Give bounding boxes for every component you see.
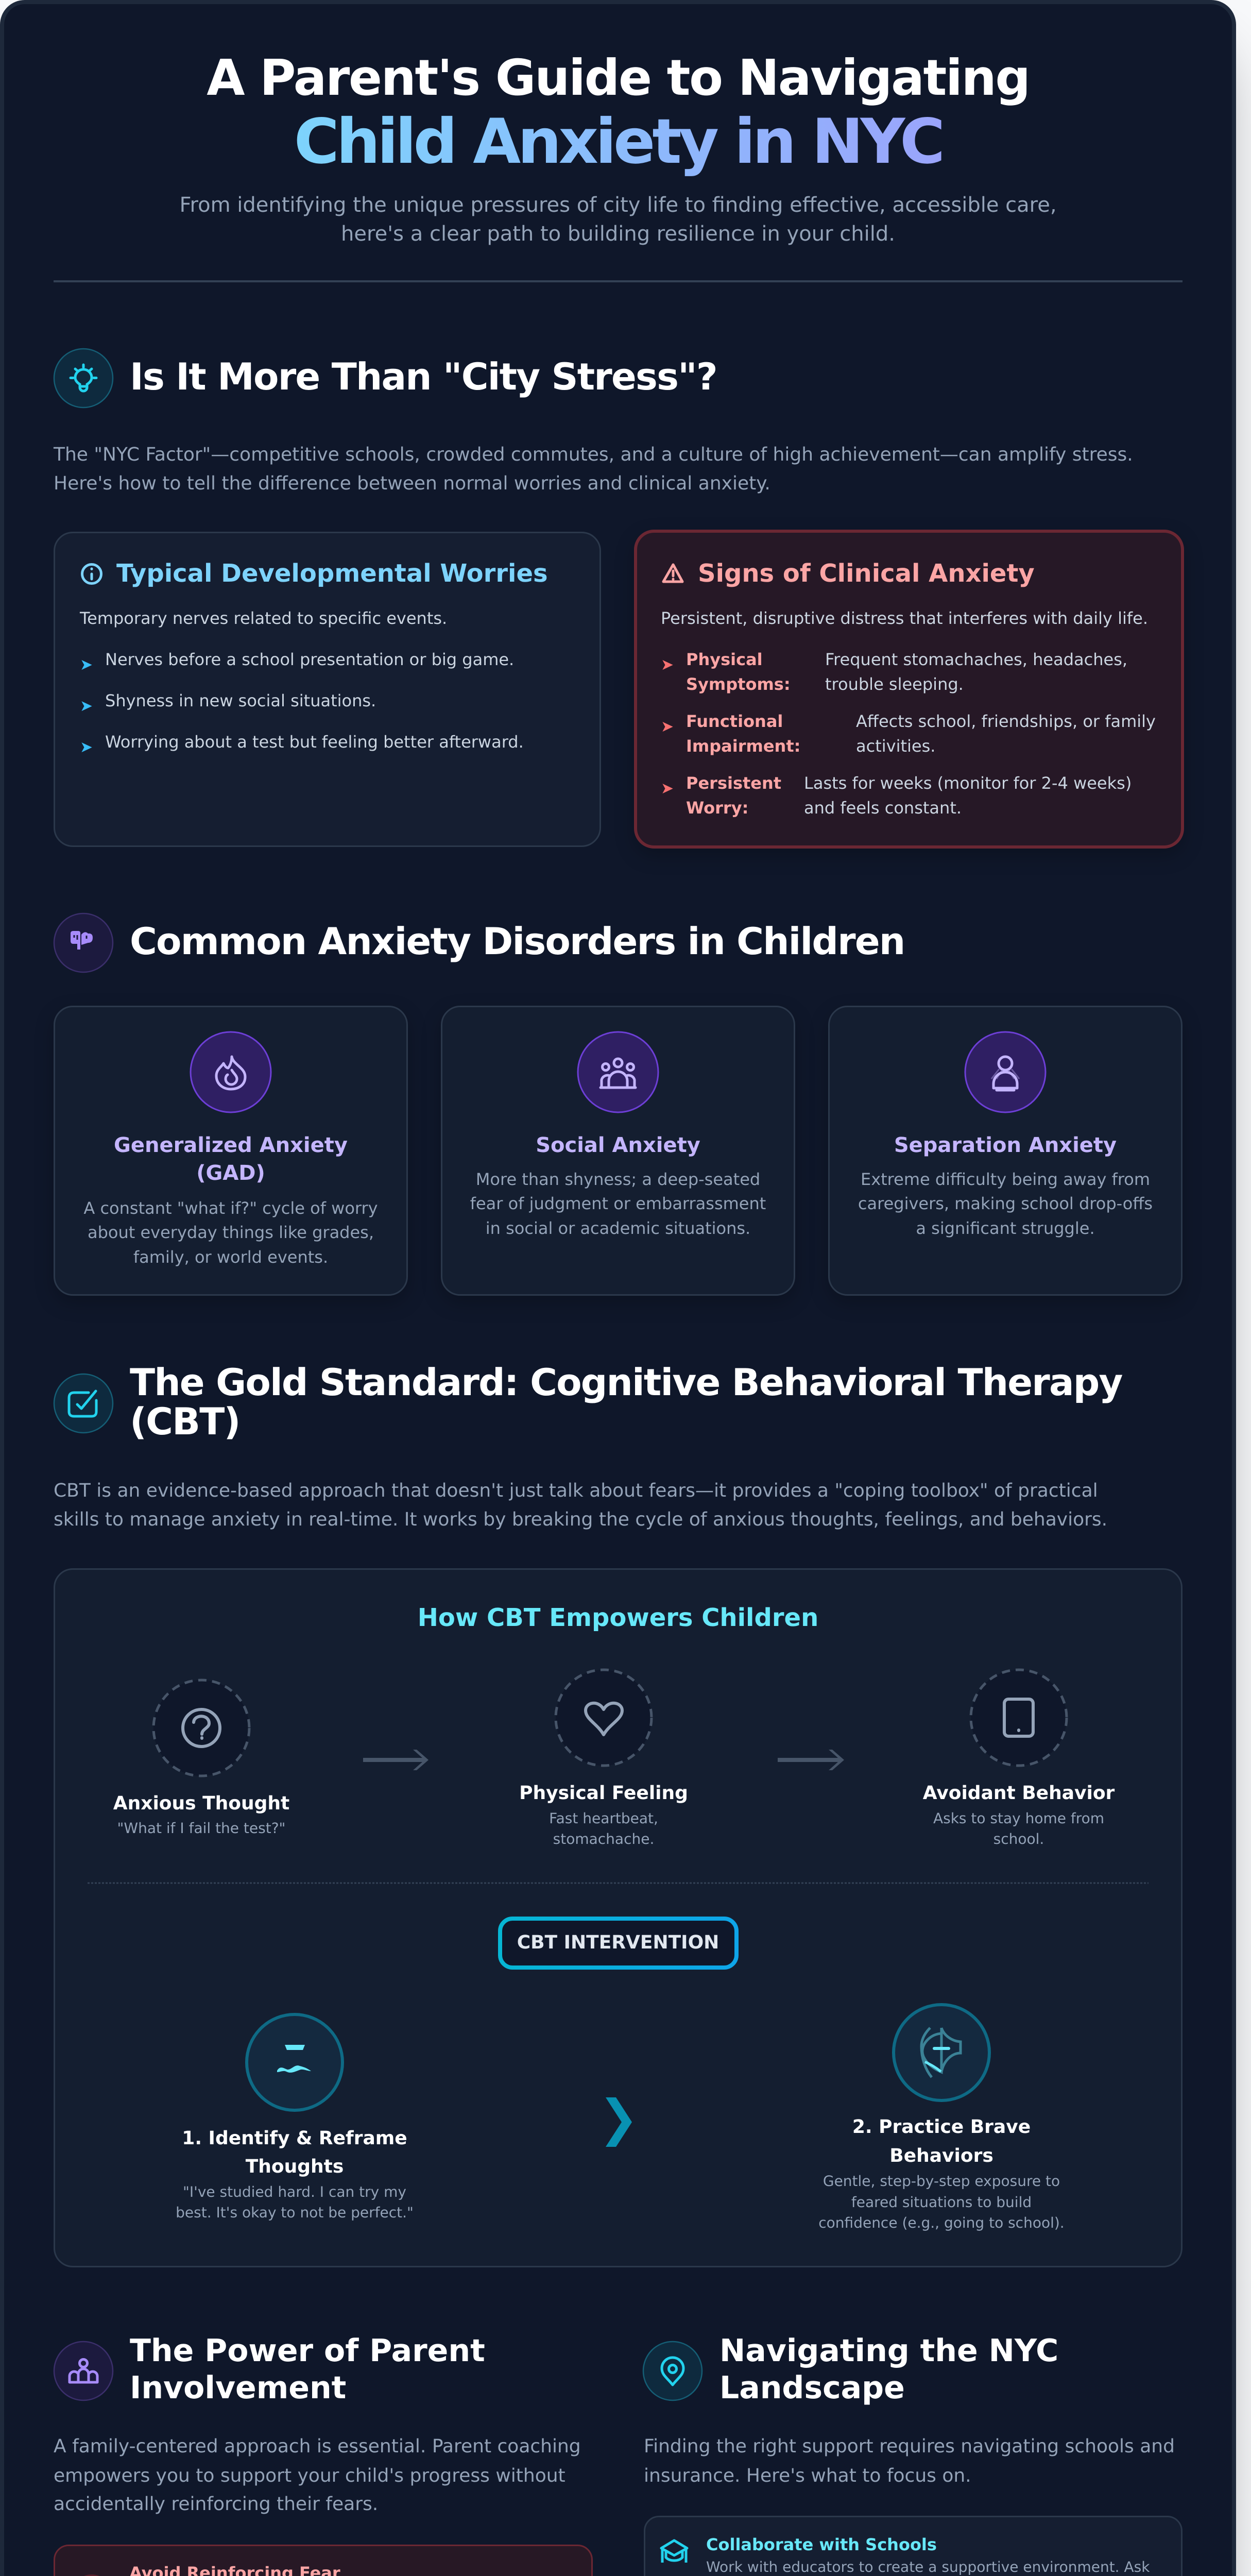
list: typical worries: Shyness in new social situations. (105, 691, 376, 710)
list item: persistent worry: ➤ (661, 779, 674, 798)
card text: GAD: A constant "what if?" cycle of worry (83, 1198, 378, 1218)
list item: physical symptoms: Symptoms: (686, 674, 791, 694)
text: parent involvement: empowers you to support your child's progress without (54, 2465, 565, 2486)
section heading: CBT (54, 1361, 1122, 1443)
icon: lightbulb (54, 349, 113, 408)
card title: GAD: Generalized Anxiety (114, 1133, 348, 1157)
badge: CBT intervention (500, 1919, 736, 1968)
list item: physical symptoms: trouble sleeping. (825, 674, 964, 694)
list: typical worries (80, 650, 524, 756)
title: Child Anxiety in NYC (294, 106, 942, 178)
panel: typical worries: Temporary nerves related to specific events. (79, 608, 447, 628)
card: collaborate with schools: Collaborate with Schools (706, 2535, 937, 2554)
section heading: parent involvement (54, 2333, 485, 2406)
node: brave behaviors (818, 2005, 1065, 2231)
list: typical worries: Nerves before a school presentation or big game. (105, 650, 514, 669)
title (207, 49, 1030, 178)
icon: people group (578, 1032, 658, 1112)
heading: CBT: The Gold Standard: Cognitive Behavioral Therapy (130, 1361, 1122, 1404)
heading: parent involvement: The Power of Parent (130, 2333, 485, 2369)
card text: separation: Extreme difficulty being away from (861, 1170, 1150, 1189)
arrow: chevron (606, 2097, 632, 2147)
node: avoidant behavior: school. (993, 1831, 1044, 1848)
intro text: CBT: CBT is an evidence-based approach that doesn't just talk about fears—it provides a "coping toolbox" of practical (54, 1480, 1098, 1501)
icon: heart (586, 1703, 622, 1735)
section heading: NYC landscape (643, 2333, 1058, 2406)
card: collaborate with schools (645, 2516, 1181, 2576)
panel: clinical anxiety (636, 531, 1183, 847)
step title: 1. Identify & Reframe (182, 2128, 407, 2149)
icon: warning triangle (663, 565, 682, 582)
text: NYC landscape (644, 2436, 1175, 2486)
text: parent involvement: accidentally reinforcing their fears. (54, 2494, 378, 2515)
subtitle: From identifying the unique pressures of city life to finding effective, accessible care, (179, 193, 1057, 217)
card text: social: in social or academic situations. (486, 1218, 750, 1238)
list item: physical symptoms: Physical (686, 650, 763, 669)
heading: NYC landscape: Landscape (719, 2370, 905, 2406)
intro text: NYC factor (53, 444, 1133, 494)
heading: CBT (130, 1361, 1122, 1443)
intro text: NYC factor: The "NYC Factor"—competitive schools, crowded commutes, and a culture of high achievement—can amplify stress. (53, 444, 1133, 465)
step title: Behaviors (889, 2145, 993, 2166)
arrow (778, 1750, 844, 1770)
step text (818, 2173, 1065, 2231)
node: anxious thought: Anxious Thought (113, 1793, 289, 1814)
list: typical worries: ➤ (80, 697, 93, 715)
icon: info (82, 565, 101, 583)
section heading: city stress: Is It More Than "City Stress"? (130, 355, 717, 398)
list item: physical symptoms: ➤ (661, 656, 674, 674)
badge: CBT intervention: CBT INTERVENTION (517, 1932, 719, 1953)
heading: NYC landscape (719, 2333, 1058, 2406)
card title: GAD (114, 1133, 348, 1185)
text: parent involvement (54, 2436, 581, 2515)
callout: avoid reinforcing fear (55, 2545, 592, 2576)
heading: parent involvement: Involvement (130, 2370, 346, 2406)
icon: map pin (643, 2342, 702, 2400)
heading: typical worries: Typical Developmental Worries (116, 559, 548, 588)
icon: question (183, 1709, 220, 1747)
list: typical worries: Worrying about a test but feeling better afterward. (105, 732, 524, 752)
icon: shield steps (921, 2028, 961, 2077)
step title (852, 2116, 1031, 2166)
arrow (363, 1750, 429, 1770)
node: anxious thought: "What if I fail the test?" (117, 1820, 285, 1837)
step text (176, 2183, 414, 2221)
card: collaborate with schools: Work with educators to create a supportive environment. Ask (706, 2558, 1150, 2575)
icon: gauge check (54, 1374, 113, 1433)
card text: social: More than shyness; a deep-seated (476, 1170, 760, 1189)
list item: functional impairment: Impairment: (686, 736, 800, 756)
list item: functional impairment: activities. (856, 736, 935, 756)
intro text: NYC factor: Here's how to tell the difference between normal worries and clinical anxiety. (54, 473, 770, 494)
list item: persistent worry (661, 773, 1132, 818)
intro text: CBT (54, 1480, 1107, 1530)
icon: flame (191, 1032, 271, 1112)
list item: persistent worry: Persistent (686, 773, 781, 793)
heading: CBT: (CBT) (130, 1400, 240, 1443)
step text: confidence (e.g., going to school). (818, 2214, 1065, 2231)
card: generalized anxiety (55, 1007, 407, 1295)
step text: "I've studied hard. I can try my (183, 2183, 406, 2200)
diagram heading: How CBT Empowers Children (418, 1603, 818, 1632)
section heading: disorders (54, 913, 904, 972)
card title: GAD: (GAD) (196, 1161, 265, 1185)
panel: typical worries (55, 533, 601, 846)
list item: functional impairment: Affects school, friendships, or family (856, 711, 1156, 731)
card title: separation: Separation Anxiety (894, 1133, 1117, 1157)
node: physical feeling: Physical Feeling (519, 1783, 688, 1804)
icon: graduation cap (661, 2540, 687, 2563)
step text: Gentle, step-by-step exposure to (823, 2173, 1060, 2190)
list item: functional impairment: Functional (686, 711, 783, 731)
panel: clinical anxiety: Persistent, disruptive distress that interferes with daily life. (661, 608, 1148, 628)
card title: social: Social Anxiety (536, 1133, 700, 1157)
heading: NYC landscape: Navigating the NYC (719, 2333, 1058, 2369)
section heading: city stress (54, 349, 717, 408)
card: separation anxiety (829, 1007, 1181, 1295)
heading: parent involvement (130, 2333, 485, 2406)
intro text: CBT: skills to manage anxiety in real-time. It works by breaking the cycle of anxious thoughts, feelings, and behaviors. (54, 1509, 1107, 1530)
step text: feared situations to build (851, 2194, 1032, 2211)
list item: physical symptoms: Frequent stomachaches, headaches, (825, 650, 1127, 669)
card: social anxiety (442, 1007, 794, 1295)
card text: social (470, 1170, 766, 1238)
subtitle: here's a clear path to building resilience in your child. (341, 222, 895, 246)
node: reframe thoughts (176, 2014, 414, 2221)
node: anxious thought (113, 1680, 289, 1837)
icon: cross (72, 2574, 112, 2576)
card text: separation: caregivers, making school drop-offs (858, 1194, 1153, 1213)
list: typical worries: ➤ (80, 656, 93, 674)
heading: clinical anxiety: Signs of Clinical Anxiety (698, 559, 1035, 588)
card text: GAD: about everyday things like grades, (88, 1223, 374, 1242)
node: physical feeling: stomachache. (553, 1831, 654, 1848)
icon: reframe (277, 2045, 311, 2073)
card text: social: fear of judgment or embarrassment (470, 1194, 766, 1213)
list item: functional impairment (661, 711, 1156, 756)
icon: parent (54, 2342, 113, 2400)
step title: 2. Practice Brave (852, 2116, 1031, 2138)
list item: persistent worry: Worry: (686, 798, 748, 818)
card text: GAD (83, 1198, 378, 1267)
node: avoidant behavior: Asks to stay home from (933, 1810, 1104, 1827)
node: avoidant behavior: Avoidant Behavior (923, 1783, 1115, 1804)
list item: persistent worry: and feels constant. (804, 798, 962, 818)
node: avoidant behavior (923, 1670, 1115, 1848)
node: physical feeling: Fast heartbeat, (549, 1810, 658, 1827)
step title (182, 2128, 407, 2177)
panel: CBT diagram (55, 1569, 1181, 2267)
list item: functional impairment: ➤ (661, 718, 674, 736)
node: physical feeling (519, 1670, 688, 1848)
text: NYC landscape: Finding the right support requires navigating schools and (644, 2436, 1175, 2457)
subtitle (179, 193, 1057, 246)
card text: separation (858, 1170, 1153, 1238)
step text: best. It's okay to not be perfect." (176, 2204, 414, 2221)
text: parent involvement: A family-centered approach is essential. Parent coaching (54, 2436, 581, 2457)
title: A Parent's Guide to Navigating (207, 49, 1030, 107)
card text: GAD: family, or world events. (133, 1247, 328, 1267)
icon: person (965, 1032, 1046, 1112)
text: NYC landscape: insurance. Here's what to focus on. (644, 2465, 971, 2486)
card text: separation: a significant struggle. (916, 1218, 1095, 1238)
step title: Thoughts (246, 2156, 344, 2177)
list: typical worries: ➤ (80, 738, 93, 756)
icon: puzzle brain (54, 913, 113, 972)
icon: phone (1004, 1699, 1033, 1736)
list item: persistent worry: Lasts for weeks (monitor for 2-4 weeks) (804, 773, 1132, 793)
section heading: disorders: Common Anxiety Disorders in Children (130, 920, 904, 963)
list item: physical symptoms (661, 650, 1127, 694)
